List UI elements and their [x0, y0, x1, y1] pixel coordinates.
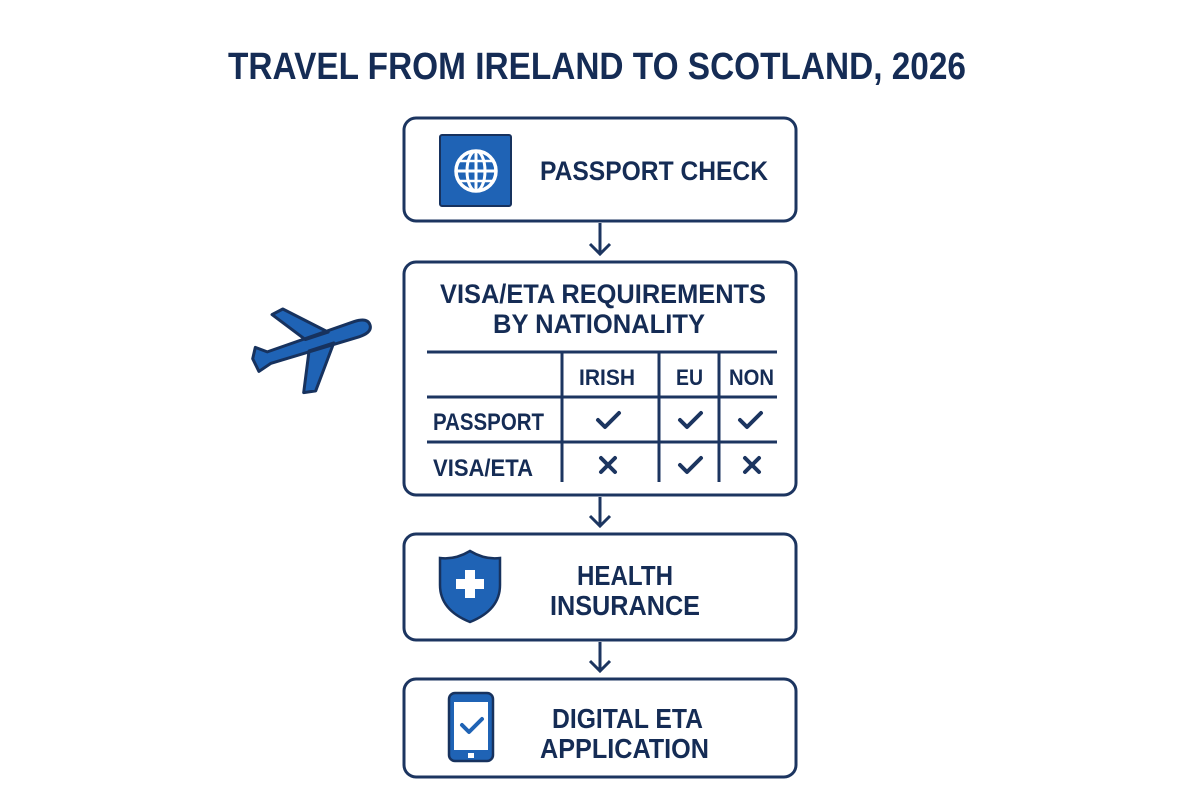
- arrow 1: [590, 223, 610, 254]
- arrow 2: [590, 497, 610, 526]
- table: nationality requirements: NON: [729, 365, 774, 390]
- heading: digital eta application: DIGITAL ETA: [552, 703, 703, 734]
- title: TRAVEL FROM IRELAND TO SCOTLAND, 2026: [228, 46, 966, 88]
- table: nationality requirements: EU: [676, 365, 703, 390]
- heading: health insurance: INSURANCE: [550, 590, 700, 621]
- heading: digital eta application: APPLICATION: [540, 733, 709, 764]
- heading: visa/eta requirements: BY NATIONALITY: [493, 309, 705, 339]
- heading: digital eta application: [540, 703, 709, 764]
- arrow 3: [590, 642, 610, 671]
- panel: visa/eta requirements: [404, 262, 796, 495]
- icon: phone: [449, 693, 493, 761]
- panel: passport check: [404, 118, 796, 221]
- table: nationality requirements: VISA/ETA: [433, 455, 533, 482]
- heading: visa/eta requirements: [440, 279, 766, 339]
- heading: health insurance: HEALTH: [577, 560, 673, 591]
- heading: visa/eta requirements: VISA/ETA REQUIREMENTS: [440, 279, 766, 309]
- panel: health insurance: [404, 534, 796, 640]
- table: nationality requirements: [427, 352, 777, 482]
- table: nationality requirements: PASSPORT: [433, 409, 544, 436]
- heading: passport check: PASSPORT CHECK: [540, 156, 768, 186]
- heading: health insurance: [550, 560, 700, 621]
- icon: airplane: [241, 285, 384, 406]
- panel: digital eta application: [404, 679, 796, 777]
- table: nationality requirements: IRISH: [579, 365, 635, 390]
- icon: globe: [440, 135, 511, 206]
- icon: shield: [440, 551, 500, 622]
